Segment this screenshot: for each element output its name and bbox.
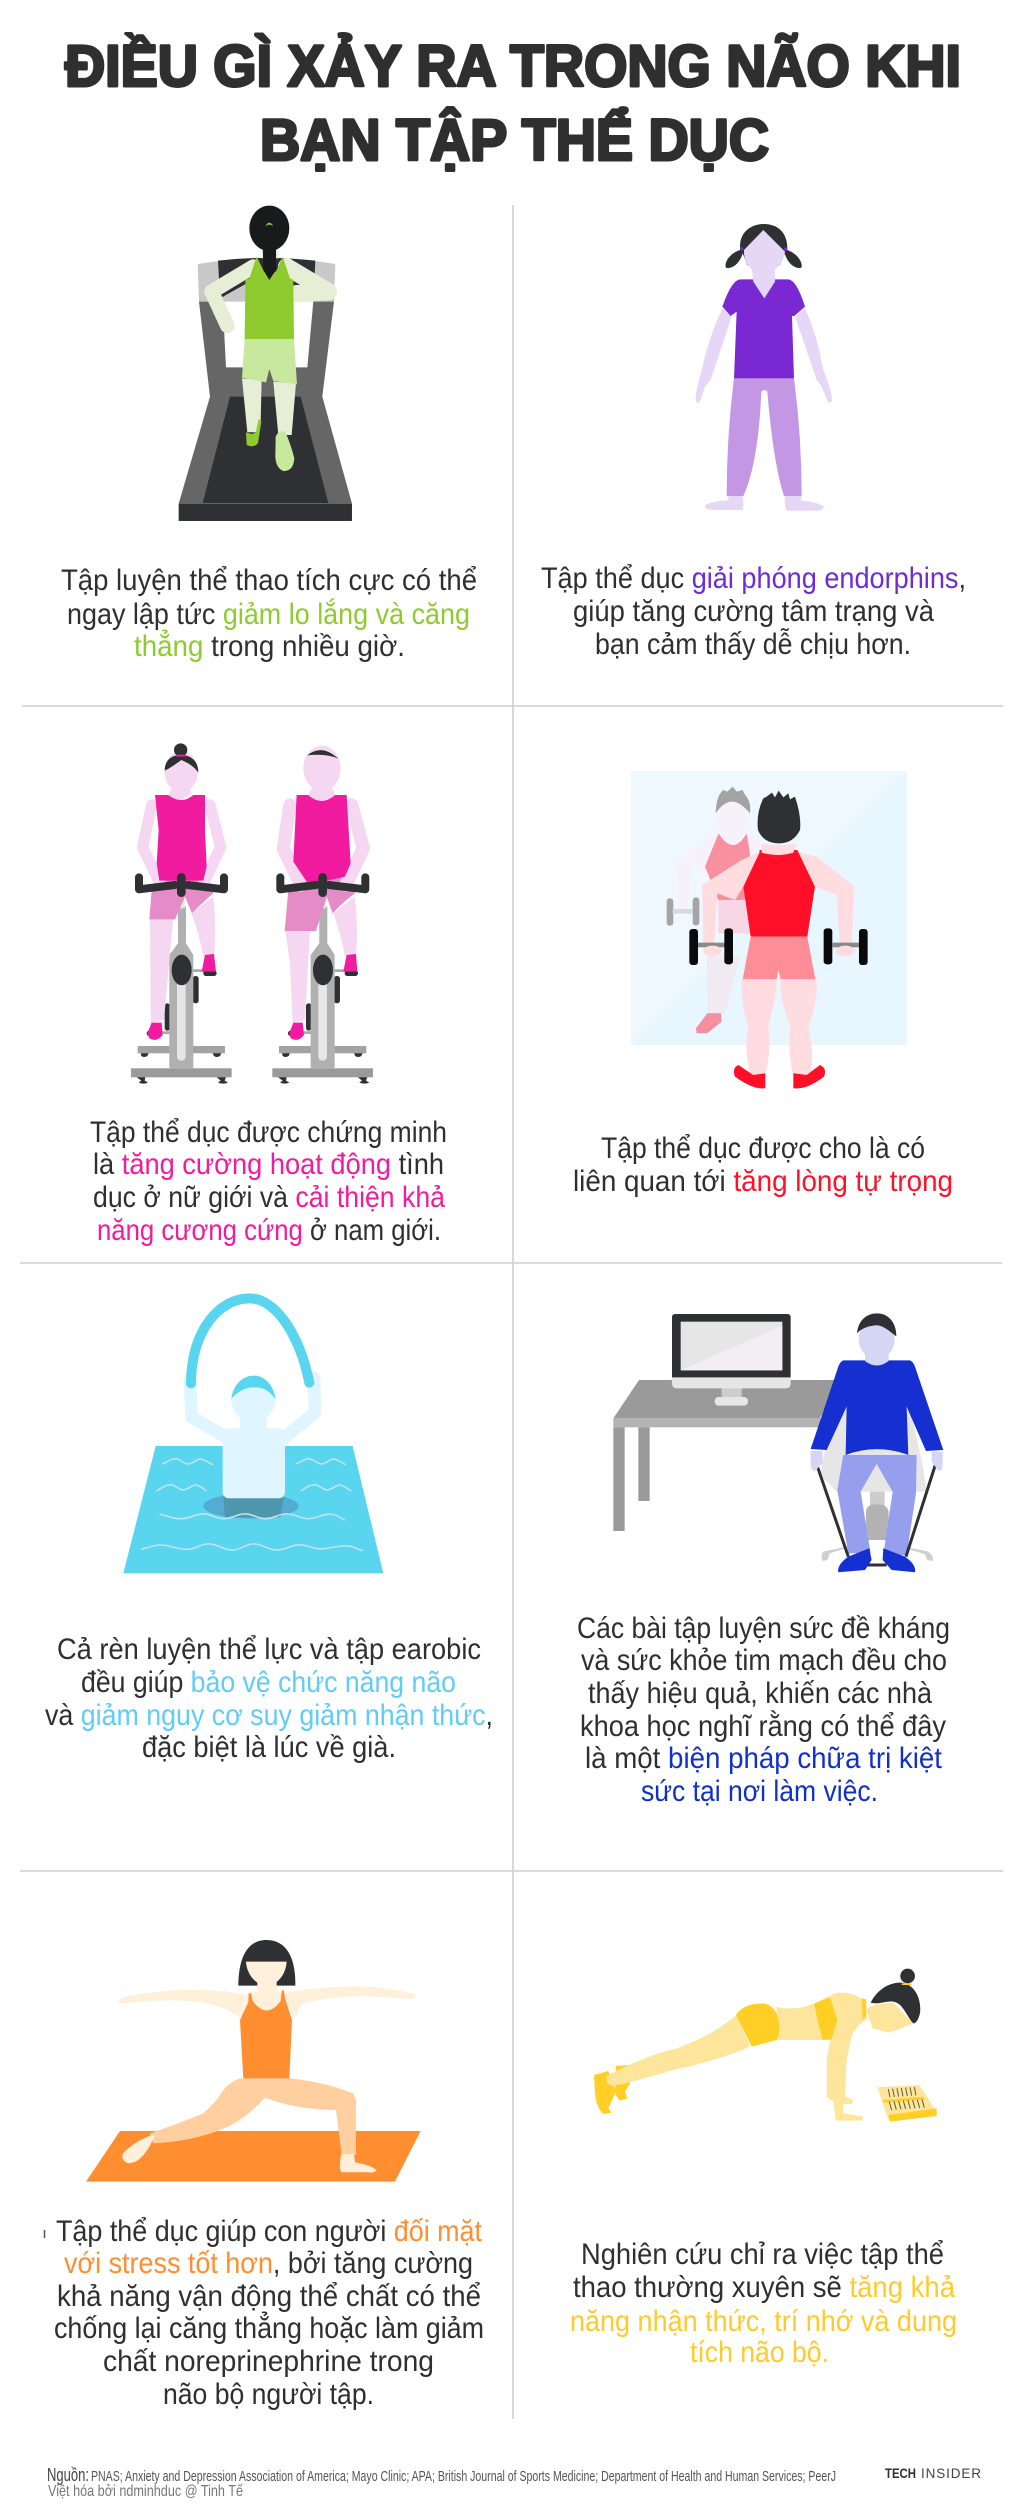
text: card 8: năng nhận thức, trí nhớ và dung: [570, 2305, 957, 2338]
text: card 5: [45, 1633, 493, 1764]
text: card 7: [44, 2215, 484, 2411]
text: card 5: đặc biệt là lúc về già.: [142, 1731, 396, 1764]
logo: Tech Insider: TECH: [885, 2466, 916, 2481]
text: card 6: và sức khỏe tim mạch đều cho: [581, 1644, 947, 1677]
text: card 3: là tăng cường hoạt động tình: [93, 1148, 444, 1181]
text: card 7: chống lại căng thẳng hoặc làm giảm: [54, 2311, 484, 2345]
text: card 4: Tập thể dục được cho là có: [601, 1132, 925, 1165]
title: [65, 34, 961, 173]
text: card 4: [573, 1132, 953, 1198]
text: card 8: tích não bộ.: [690, 2336, 829, 2369]
icon: swimmer with pool noodle: [123, 1298, 383, 1573]
text: card 6: [577, 1612, 950, 1808]
text: card 6: là một biện pháp chữa trị kiệt: [585, 1742, 943, 1775]
text: card 6: khoa học nghĩ rằng có thể đây: [580, 1710, 946, 1743]
icon: purple standing woman: [696, 224, 832, 511]
text: card 7: khả năng vận động thể chất có thể: [57, 2280, 481, 2313]
text: card 5: và giảm nguy cơ suy giảm nhận thức,: [45, 1699, 493, 1732]
text: card 6: thấy hiệu quả, khiến các nhà: [588, 1677, 932, 1710]
footer: sources and credit: Việt hóa bởi ndminhduc @ Tinh Tế: [48, 2483, 243, 2500]
text: card 6: sức tại nơi làm việc.: [641, 1775, 878, 1808]
text: card 4: liên quan tới tăng lòng tự trọng: [573, 1165, 953, 1198]
text: card 3: Tập thể dục được chứng minh: [90, 1116, 447, 1149]
icon: plank / push-up woman with book: [594, 1969, 937, 2122]
logo: Tech Insider: [885, 2466, 981, 2481]
footer: sources and credit: Nguồn:: [47, 2465, 89, 2485]
icon: office worker with resistance bands at desk: [613, 1313, 943, 1572]
text: card 7: Tập thể dục giúp con người đối mặt: [56, 2215, 483, 2248]
text: card 1: thẳng trong nhiều giờ.: [134, 629, 405, 663]
icon: two people on exercise bikes: [131, 743, 373, 1084]
text: card 7: chất noreprinephrine trong: [103, 2345, 434, 2378]
text: card 2: bạn cảm thấy dễ chịu hơn.: [595, 628, 911, 661]
text: card 7: với stress tốt hơn, bởi tăng cường: [64, 2247, 473, 2280]
icon: treadmill runner: [179, 206, 352, 521]
text: card 8: Nghiên cứu chỉ ra việc tập thể: [581, 2238, 944, 2271]
text: card 2: giúp tăng cường tâm trạng và: [573, 595, 934, 628]
text: card 2: Tập thể dục giải phóng endorphins,: [541, 562, 966, 595]
footer: sources and credit: [47, 2465, 836, 2500]
text: card 6: Các bài tập luyện sức đề kháng: [577, 1612, 950, 1645]
text: card 1: [61, 564, 477, 663]
text: card 3: [90, 1116, 447, 1247]
text: card 8: thao thường xuyên sẽ tăng khả: [573, 2271, 955, 2304]
text: card 1: Tập luyện thể thao tích cực có thể: [61, 564, 477, 597]
logo: Tech Insider: INSIDER: [921, 2466, 981, 2481]
text: card 1: ngay lập tức giảm lo lắng và căng: [67, 598, 470, 631]
icon: yoga warrior pose: [86, 1940, 421, 2182]
text: card 7: não bộ người tập.: [163, 2378, 374, 2411]
title: BẠN TẬP THỂ DỤC: [260, 108, 769, 173]
icon: man lifting dumbbells at mirror: [631, 771, 907, 1088]
text: card 5: Cả rèn luyện thể lực và tập earobic: [57, 1633, 481, 1666]
text: card 3: dục ở nữ giới và cải thiện khả: [93, 1181, 445, 1214]
text: card 2: [541, 562, 966, 661]
title: ĐIỀU GÌ XẢY RA TRONG NÃO KHI: [65, 34, 961, 99]
text: card 3: năng cương cứng ở nam giới.: [97, 1214, 441, 1247]
text: card 5: đều giúp bảo vệ chức năng não: [81, 1666, 456, 1699]
text: card 8: [570, 2238, 957, 2369]
